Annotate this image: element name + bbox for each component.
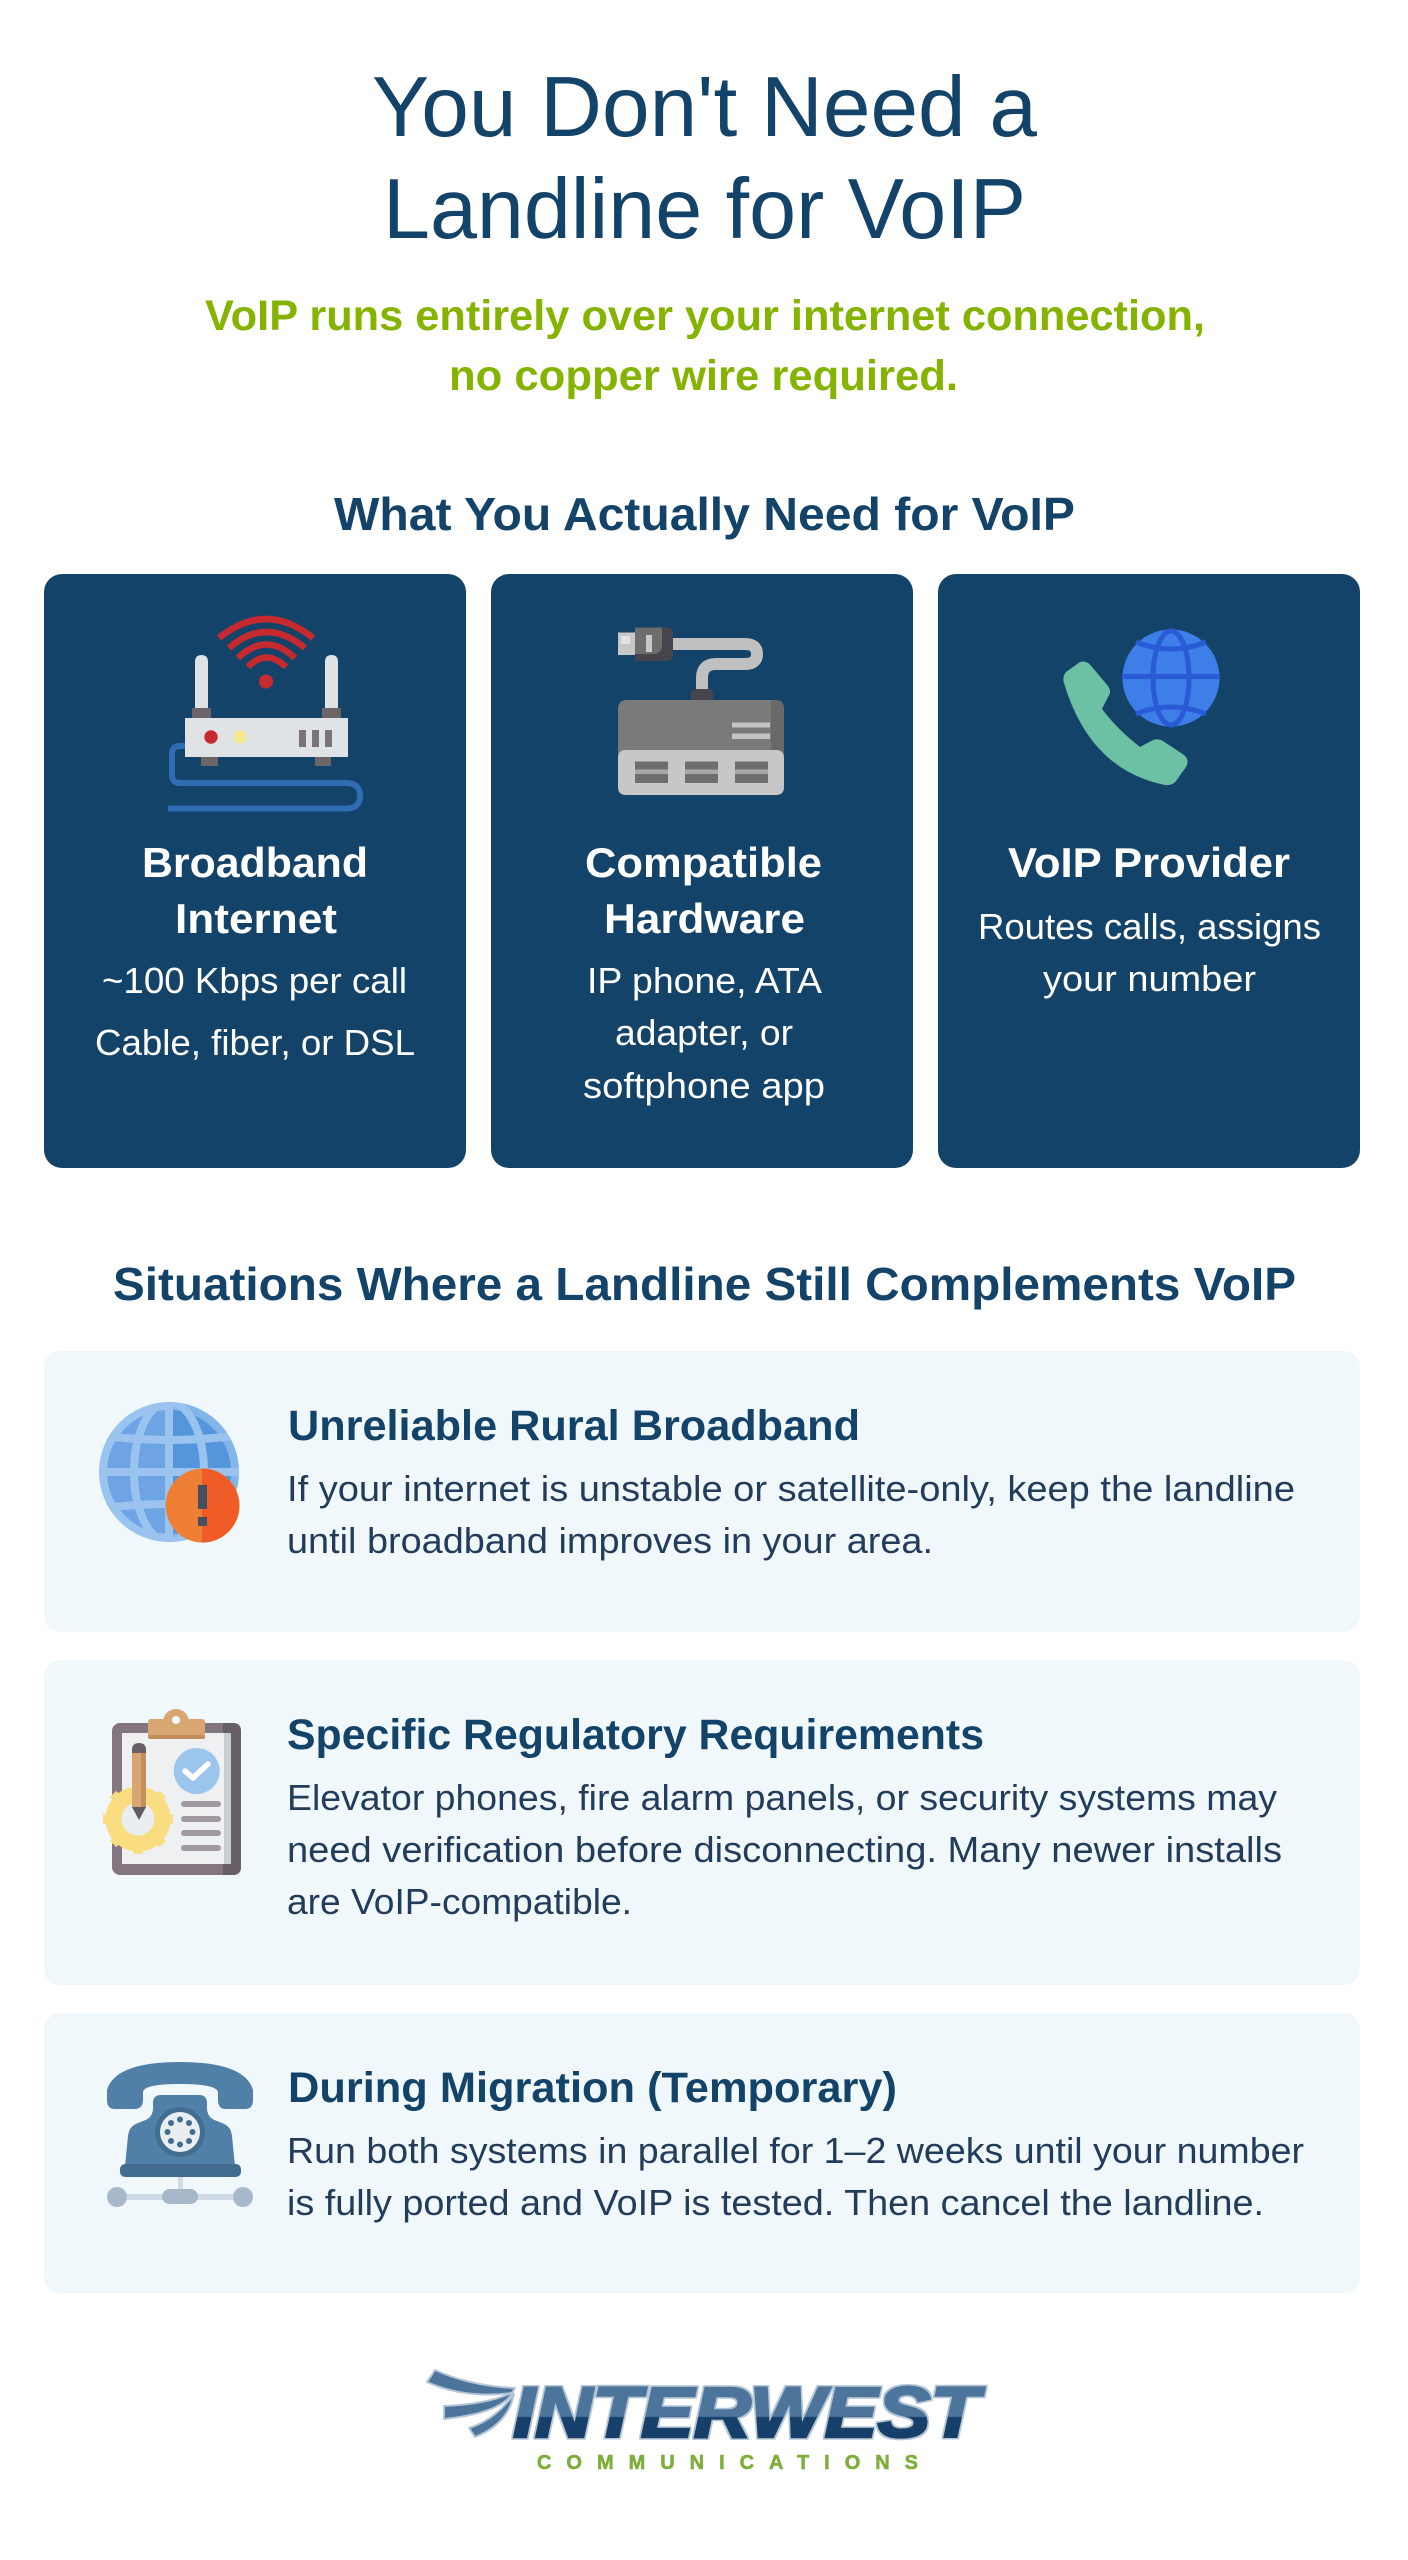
card text: ~100 Kbps per call (102, 960, 407, 1001)
card text: need verification before disconnecting. Many newer installs (287, 1829, 1282, 1870)
title (372, 60, 1038, 257)
card text: Run both systems in parallel for 1–2 weeks until your number (287, 2130, 1304, 2171)
card heading: During Migration (Temporary) (288, 2064, 897, 2112)
heading: situations: Situations Where a Landline Still Complements VoIP (113, 1258, 1296, 1310)
panel: regulatory requirements (44, 1660, 1360, 1985)
subtitle: no copper wire required. (449, 352, 958, 400)
icon: wifi router (168, 619, 360, 808)
card text (287, 1777, 1282, 1922)
card heading (585, 839, 822, 942)
card heading: Internet (175, 895, 337, 942)
card heading: Specific Regulatory Requirements (287, 1711, 984, 1759)
icon: globe and handset (1063, 630, 1220, 785)
card heading: Hardware (604, 895, 805, 942)
card text (583, 960, 825, 1106)
card text: your number (1043, 958, 1256, 999)
icon: network hub (618, 628, 784, 795)
card text: IP phone, ATA (587, 960, 822, 1001)
subtitle (205, 292, 1205, 400)
card text (287, 1468, 1295, 1561)
card heading (142, 839, 368, 942)
subtitle: VoIP runs entirely over your internet connection, (205, 292, 1205, 340)
card heading: VoIP Provider (1008, 839, 1290, 886)
panel: unreliable rural broadband (44, 1351, 1360, 1632)
card heading: Unreliable Rural Broadband (288, 1402, 860, 1450)
card text: until broadband improves in your area. (287, 1520, 933, 1561)
logo tagline: COMMUNICATIONS (537, 2452, 918, 2474)
logo: interwest communications (427, 2370, 985, 2474)
card text: Cable, fiber, or DSL (95, 1022, 415, 1063)
icon: globe with alert (99, 1402, 240, 1543)
card text: softphone app (583, 1065, 825, 1106)
title: You Don't Need a (372, 60, 1038, 155)
heading: what you need: What You Actually Need for VoIP (334, 488, 1075, 540)
card text (95, 960, 415, 1063)
card text (978, 906, 1321, 999)
card text: Elevator phones, fire alarm panels, or security systems may (287, 1777, 1277, 1818)
logo wings (427, 2370, 515, 2437)
card text (287, 2130, 1304, 2223)
card text: Routes calls, assigns (978, 906, 1321, 947)
card heading: Broadband (142, 839, 368, 886)
card text: is fully ported and VoIP is tested. Then cancel the landline. (287, 2182, 1264, 2223)
panel: broadband internet (44, 574, 466, 1168)
logo wordmark: INTERWEST (513, 2374, 985, 2453)
title: Landline for VoIP (383, 162, 1026, 257)
panel: compatible hardware (491, 574, 913, 1168)
panel: during migration (44, 2013, 1360, 2293)
icon: rotary telephone (107, 2062, 253, 2207)
panel: voip provider (938, 574, 1360, 1168)
icon: clipboard with gear (103, 1709, 241, 1875)
card text: are VoIP-compatible. (287, 1881, 632, 1922)
card heading: Compatible (585, 839, 822, 886)
card text: If your internet is unstable or satellite-only, keep the landline (287, 1468, 1295, 1509)
card text: adapter, or (615, 1012, 793, 1053)
